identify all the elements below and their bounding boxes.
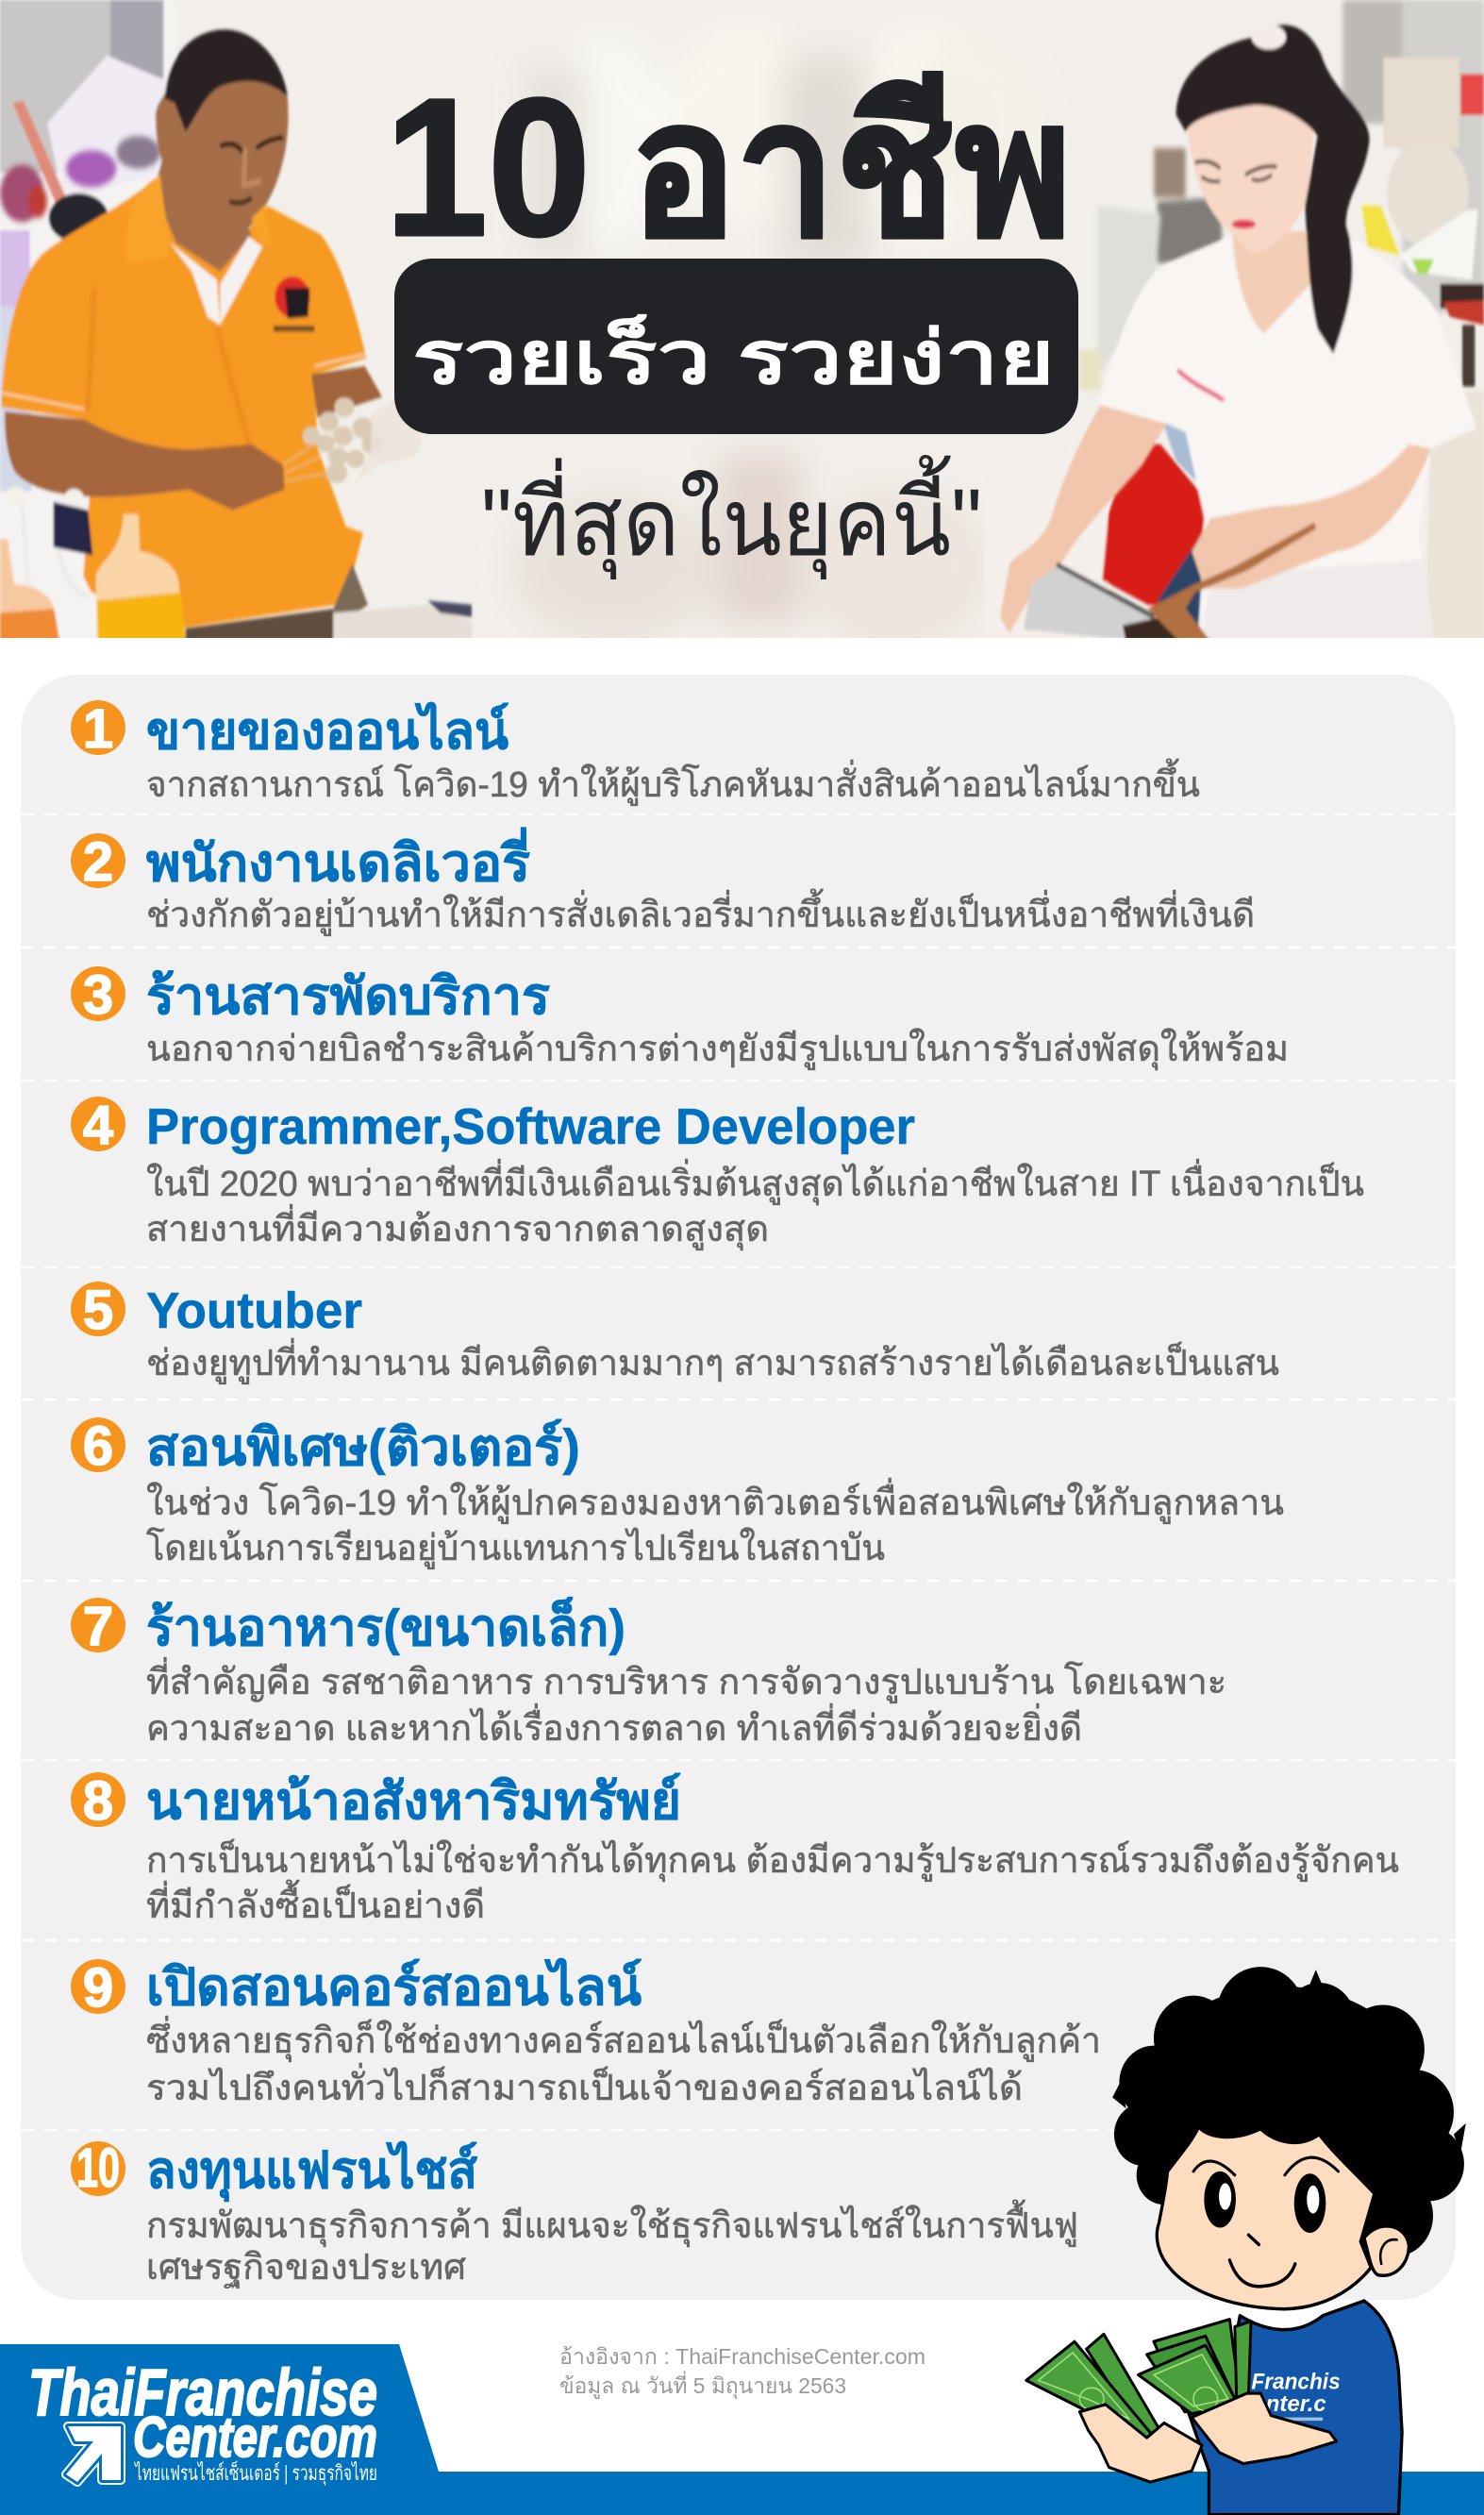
item 3: ร้านสารพัดบริการ	[146, 968, 550, 1025]
item 5: 5	[83, 1280, 113, 1341]
skewered meatballs	[303, 397, 384, 483]
item 7: 7	[83, 1596, 113, 1657]
item 10: กรมพัฒนาธุรกิจการค้า มีแผนจะใช้ธุรกิจแฟรนไชส์ในการฟื้นฟู	[146, 2199, 1078, 2247]
logo: ThaiFranchise Center.com: Center.com	[133, 2406, 377, 2469]
item 8	[71, 1770, 1399, 1926]
title: 10 อาชีพ: 10	[385, 59, 591, 277]
item 1	[71, 698, 1200, 806]
item 9: เปิดสอนคอร์สออนไลน์	[146, 1957, 642, 2016]
sauce bottles	[0, 539, 59, 642]
item 3: นอกจากจ่ายบิลชำระสินค้าบริการต่างๆยังมีรูปแบบในการรับส่งพัสดุให้พร้อม	[146, 1029, 1289, 1070]
item 2: พนักงานเดลิเวอรี่	[146, 827, 530, 892]
item 1: จากสถานการณ์ โควิด-19 ทำให้ผู้บริโภคหันมาสั่งสินค้าออนไลน์มากขึ้น	[146, 758, 1200, 806]
item 2	[71, 827, 1255, 936]
item 4: ในปี 2020 พบว่าอาชีพที่มีเงินเดือนเริ่มต้นสูงสุดได้แก่อาชีพในสาย IT เนื่องจากเป็น	[146, 1159, 1364, 1205]
item 8: การเป็นนายหน้าไม่ใช่จะทำกันได้ทุกคน ต้องมีความรู้ประสบการณ์รวมถึงต้องรู้จักคน	[146, 1838, 1399, 1882]
trousers and tray	[186, 609, 333, 642]
item 3: 3	[83, 964, 113, 1026]
source note	[559, 2344, 925, 2399]
item 6: สอนพิเศษ(ติวเตอร์)	[146, 1418, 580, 1476]
mascot hands and arm	[1079, 2393, 1337, 2482]
mascot: curly haired boy holding banknotes	[1026, 1967, 1466, 2515]
source note: อ้างอิงจาก : ThaiFranchiseCenter.com	[559, 2344, 925, 2369]
item 8: นายหน้าอสังหาริมทรัพย์	[146, 1772, 681, 1830]
item 9	[71, 1957, 1101, 2108]
item 6: โดยเน้นการเรียนอยู่บ้านแทนการไปเรียนในสถาบัน	[146, 1527, 885, 1569]
panel: career list	[21, 675, 1456, 2300]
mascot ear	[1364, 2226, 1409, 2275]
shirt	[1097, 237, 1476, 642]
item 7: ที่สำคัญคือ รสชาติอาหาร การบริหาร การจัดวางรูปแบบร้าน โดยเฉพาะ	[146, 1657, 1226, 1703]
item 7	[71, 1596, 1226, 1749]
item 4: Programmer,Software Developer	[146, 1098, 915, 1155]
item 3	[71, 964, 1289, 1070]
item 8: 8	[83, 1770, 113, 1832]
item 6	[71, 1416, 1284, 1569]
arms	[1192, 444, 1431, 588]
title: 10 อาชีพ	[394, 71, 1064, 240]
washed background food photo	[510, 51, 983, 638]
head	[154, 66, 289, 272]
item 9: 9	[83, 1957, 113, 2019]
item 1: 1	[83, 698, 113, 760]
item 5: Youtuber	[146, 1283, 362, 1339]
item 7: ร้านอาหาร(ขนาดเล็ก)	[146, 1598, 625, 1656]
mascot eyes	[1204, 2171, 1326, 2233]
collar and undershirt	[170, 243, 220, 325]
pan and spatula	[1024, 563, 1151, 642]
shirt	[2, 176, 366, 628]
item 7: ความสะอาด และหากได้เรื่องการตลาด ทำเลที่ดีร่วมด้วยจะยิ่งดี	[146, 1703, 1082, 1749]
logo: ThaiFranchise Center.com	[28, 2356, 377, 2486]
footer blue band and logo block	[0, 2344, 1484, 2515]
title pill: รวยเร็ว รวยง่าย	[394, 259, 1078, 434]
item 10: 10	[76, 2138, 120, 2199]
title: 10 อาชีพ: อาชีพ	[630, 65, 1072, 276]
item 4	[71, 1095, 1364, 1250]
mascot: curly haired boy holding banknotes: Franchis	[1251, 2369, 1341, 2394]
item 5: ช่องยูทูปที่ทำมานาน มีคนติดตามมากๆ สามารถสร้างรายได้เดือนละเป็นแสน	[146, 1338, 1279, 1384]
item 9: รวมไปถึงคนทั่วไปก็สามารถเป็นเจ้าของคอร์สออนไลน์ได้	[146, 2063, 1023, 2108]
mascot banknotes	[1026, 2320, 1251, 2447]
item 4: สายงานที่มีความต้องการจากตลาดสูงสุด	[146, 1204, 769, 1250]
mascot: curly haired boy holding banknotes: nter.c	[1266, 2390, 1326, 2416]
item 2: ช่วงกักตัวอยู่บ้านทำให้มีการสั่งเดลิเวอรี่มากขึ้นและยังเป็นหนึ่งอาชีพที่เงินดี	[146, 888, 1255, 936]
source note: ข้อมูล ณ วันที่ 5 มิถุนายน 2563	[559, 2371, 846, 2399]
item 2: 2	[83, 831, 113, 893]
item 1: ขายของออนไลน์	[146, 701, 509, 760]
item 9: ซึ่งหลายธุรกิจก็ใช้ช่องทางคอร์สออนไลน์เป็นตัวเลือกให้กับลูกค้า	[146, 2016, 1101, 2062]
item 8: ที่มีกำลังซื้อเป็นอย่างดี	[146, 1879, 485, 1926]
item 6: 6	[83, 1416, 113, 1477]
item 5	[71, 1280, 1279, 1384]
title pill: รวยเร็ว รวยง่าย: รวยเร็ว รวยง่าย	[412, 314, 1055, 399]
hair	[1176, 25, 1370, 354]
item 10	[71, 2138, 1078, 2289]
item 10: เศษรฐกิจของประเทศ	[146, 2248, 466, 2289]
icon: logo arrow	[66, 2426, 121, 2482]
header photo banner	[0, 0, 1484, 651]
item 10: ลงทุนแฟรนไชส์	[146, 2140, 477, 2203]
item 4: 4	[83, 1095, 113, 1156]
shirt logo	[275, 277, 310, 318]
neck and face	[1233, 230, 1314, 333]
red bucket	[1102, 444, 1205, 609]
logo: ThaiFranchise Center.com: ThaiFranchise	[28, 2356, 377, 2429]
logo: ThaiFranchise Center.com: ไทยแฟรนไชส์เซ็นเตอร์ | รวมธุรกิจไทย	[134, 2459, 377, 2486]
mascot face	[1157, 2127, 1375, 2309]
mascot hair	[1112, 1967, 1466, 2256]
mascot shirt	[1189, 2301, 1402, 2515]
photo: woman in white t-shirt	[984, 0, 1484, 642]
mascot brows, nose, smile	[1193, 2157, 1338, 2287]
item 6: ในช่วง โควิด-19 ทำให้ผู้ปกครองมองหาติวเตอร์เพื่อสอนพิเศษให้กับลูกหลาน	[146, 1478, 1284, 1524]
subtitle: ที่สุดในยุคนี้: "ที่สุดในยุคนี้"	[481, 455, 982, 580]
photo: man in orange polo	[0, 0, 472, 642]
arms	[5, 411, 285, 511]
